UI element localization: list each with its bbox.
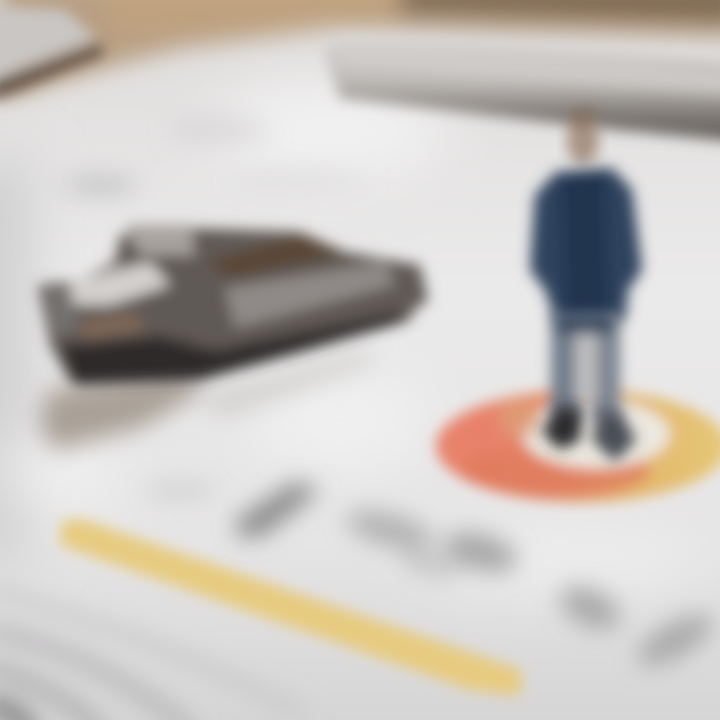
paper roll top right [322, 34, 720, 142]
faint background marks [62, 116, 370, 196]
car [38, 225, 428, 385]
paper folds bottom left [0, 590, 300, 720]
jacket [530, 168, 642, 320]
target circle on paper [436, 390, 720, 502]
car reflection [38, 350, 380, 450]
trousers [551, 312, 620, 422]
shoes [542, 405, 636, 462]
tabletop at top [0, 0, 720, 100]
paper sheet top left [0, 5, 104, 102]
yellow strip [60, 520, 522, 696]
head [567, 109, 599, 165]
soft paper shading [0, 80, 710, 590]
person [530, 109, 642, 462]
blurred lettering [144, 482, 719, 675]
